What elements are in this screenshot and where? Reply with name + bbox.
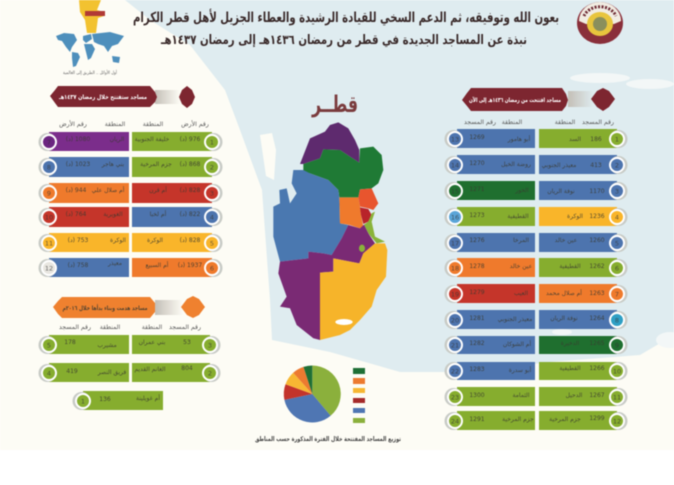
row 11: 1267 bbox=[589, 392, 605, 399]
map detail: small enclave bbox=[359, 245, 365, 252]
row 8: 8 bbox=[615, 316, 619, 324]
banner bbox=[53, 296, 205, 318]
row 12: جزم المرخية bbox=[549, 416, 581, 423]
panel: mosques inaugurated during 2016 bbox=[38, 296, 220, 410]
row 6: (د) 1937 bbox=[178, 262, 202, 269]
pie legend bbox=[353, 368, 365, 423]
row 15 bbox=[444, 181, 535, 200]
row 4: أم لخبا bbox=[150, 210, 167, 218]
row 21: 21 bbox=[451, 342, 459, 350]
row 4: 4 bbox=[615, 214, 619, 222]
banner: مساجد هدمت وبناء بدأها خلال ٢٠١٦م bbox=[62, 304, 148, 312]
row 14: 1270 bbox=[469, 160, 485, 167]
row 6: أم السبيع bbox=[146, 261, 169, 269]
row 4 bbox=[539, 207, 628, 226]
row 23: 1300 bbox=[469, 392, 485, 399]
region: Doha bbox=[364, 212, 385, 243]
row 10 bbox=[539, 362, 628, 380]
row 1: بني عمران bbox=[139, 339, 166, 346]
row 3 bbox=[539, 181, 628, 200]
region: Al Wakrah bbox=[320, 243, 387, 340]
row 10: الغويرية bbox=[103, 211, 123, 218]
row 4: 1236 bbox=[589, 213, 605, 220]
map detail: Khor Al Adaid inlet bbox=[335, 319, 353, 325]
row 11: (د) 753 bbox=[68, 237, 89, 244]
column headers: المنطقة bbox=[100, 324, 121, 331]
row 6 bbox=[539, 258, 628, 277]
row 24: 24 bbox=[451, 418, 459, 426]
row 8: 1264 bbox=[589, 315, 605, 322]
row 18: عين خالد bbox=[510, 263, 532, 270]
row 7: 1263 bbox=[589, 290, 605, 297]
banner: مساجد افتتحت من رمضان ١٤٣٦هـ إلى الآن bbox=[469, 96, 561, 104]
row 21: أم الشوكان bbox=[503, 340, 531, 348]
row 14: 14 bbox=[451, 162, 459, 170]
row 3: 3 bbox=[615, 188, 619, 196]
row 1: 3 bbox=[208, 342, 212, 350]
row 19: 19 bbox=[451, 290, 459, 298]
row 16: 1273 bbox=[469, 212, 485, 219]
row 8: (د) 1023 bbox=[66, 161, 90, 168]
row 12: 12 bbox=[613, 418, 621, 426]
row 6: 6 bbox=[210, 264, 214, 272]
row 21 bbox=[444, 336, 535, 354]
row 14 bbox=[444, 155, 535, 174]
row 2 bbox=[132, 157, 222, 177]
region: Al Shamal bbox=[300, 122, 359, 164]
row 10: 1266 bbox=[589, 365, 605, 372]
row 9: أم صلال علي bbox=[92, 186, 125, 194]
row 4: 4 bbox=[47, 370, 51, 378]
column headers: رقم المسجد bbox=[59, 324, 91, 331]
row 8: بني هاجر bbox=[101, 161, 125, 168]
row 11: 11 bbox=[613, 394, 621, 402]
column headers: رقم المسجد bbox=[169, 324, 201, 331]
row 5 bbox=[539, 233, 628, 252]
row 11: 11 bbox=[45, 240, 53, 248]
row 18: 1278 bbox=[469, 263, 485, 270]
row 6: 1262 bbox=[589, 263, 605, 270]
row 4: الوكرة bbox=[567, 213, 583, 220]
title bbox=[133, 9, 559, 48]
row 16 bbox=[444, 207, 535, 226]
column headers: رقم الأرض bbox=[181, 120, 209, 128]
row 22: أبو سدرة bbox=[509, 366, 532, 374]
row 17: 17 bbox=[451, 240, 459, 248]
column headers bbox=[59, 120, 209, 128]
row 13: 13 bbox=[451, 136, 459, 144]
row 18: 18 bbox=[451, 264, 459, 272]
row 15: الخور bbox=[514, 187, 529, 194]
row 20 bbox=[444, 310, 535, 329]
row 5: الوكرة bbox=[147, 237, 163, 244]
row 7: 7 bbox=[615, 290, 619, 298]
row 5 bbox=[72, 391, 163, 410]
row 12 bbox=[38, 258, 129, 277]
row 5: 136 bbox=[99, 396, 111, 403]
row 16: القطيفية bbox=[507, 213, 529, 220]
row 1 bbox=[132, 335, 220, 354]
column headers: المنطقة bbox=[105, 121, 126, 128]
row 5: عين خالد bbox=[555, 237, 577, 244]
row 22: 22 bbox=[451, 368, 459, 376]
row 7 bbox=[539, 284, 628, 303]
row 1: السد bbox=[569, 136, 581, 143]
logo: world map bbox=[56, 0, 124, 76]
row 11 bbox=[38, 233, 129, 252]
row 6: القطيفية bbox=[559, 263, 581, 270]
row 7: 7 bbox=[47, 138, 51, 146]
row 4 bbox=[38, 363, 129, 382]
row 4: فريق النصر bbox=[97, 369, 126, 376]
column headers: رقم الأرض bbox=[59, 120, 87, 128]
row 10 bbox=[38, 207, 129, 227]
row 20: 20 bbox=[451, 316, 459, 324]
row 11 bbox=[539, 387, 628, 406]
row 3: نوفة الريان bbox=[547, 188, 575, 195]
row 9: 9 bbox=[615, 342, 619, 350]
row 3: 3 bbox=[210, 190, 214, 198]
panel: mosques opened since Ramadan 1436 bbox=[444, 88, 628, 430]
row 13 bbox=[444, 129, 535, 148]
row 12: 12 bbox=[45, 264, 53, 272]
row 3: 1170 bbox=[589, 188, 605, 195]
row 6: 6 bbox=[615, 264, 619, 272]
row 1 bbox=[132, 132, 222, 151]
region: Al Khor bbox=[303, 147, 383, 197]
column headers: رقم المسجد bbox=[464, 119, 496, 126]
row 19: العيب bbox=[514, 290, 528, 297]
row 2: جزم المرخية bbox=[140, 161, 172, 168]
region: Al Rayyan bbox=[278, 225, 375, 340]
row 3: 178 bbox=[64, 339, 76, 346]
row 8: 8 bbox=[47, 164, 51, 172]
row 23 bbox=[444, 387, 535, 406]
title: نبذة عن المساجد الجديدة في قطر من رمضان ١٤٣٦هـ إلى رمضان ١٤٣٧هـ bbox=[160, 33, 527, 48]
pie chart bbox=[284, 366, 341, 422]
column headers bbox=[464, 119, 614, 126]
row 5: 5 bbox=[210, 240, 214, 248]
row 5: 1 bbox=[81, 398, 85, 406]
row 1 bbox=[539, 129, 628, 148]
row 15: 1271 bbox=[469, 186, 485, 193]
column headers: المنطقة bbox=[143, 121, 164, 128]
row 7: (د) 1080 bbox=[66, 136, 90, 143]
region: Al Daayen bbox=[358, 188, 378, 210]
row 2: 2 bbox=[208, 370, 212, 378]
row 2 bbox=[539, 155, 628, 174]
row 17: المرخا bbox=[513, 237, 529, 244]
row 3: 5 bbox=[47, 342, 51, 350]
row 3: مشيرب bbox=[97, 342, 117, 349]
row 7: الريان bbox=[110, 136, 125, 143]
row 2: 2 bbox=[615, 162, 619, 170]
banner bbox=[462, 88, 615, 111]
row 23: 23 bbox=[451, 394, 459, 402]
row 4: (د) 822 bbox=[180, 211, 201, 218]
row 10: القطيفية bbox=[559, 365, 581, 372]
row 1: 1 bbox=[615, 136, 619, 144]
row 20: معيذر الجنوبي bbox=[498, 316, 532, 323]
row 14: روضة الخيل bbox=[501, 161, 531, 168]
row 15: 15 bbox=[451, 188, 459, 196]
row 22 bbox=[444, 362, 535, 380]
column headers: المنطقة bbox=[502, 119, 523, 126]
banner bbox=[50, 86, 195, 108]
row 12: 1299 bbox=[589, 415, 605, 422]
row 9: (د) 944 bbox=[66, 187, 87, 194]
row 13: 1269 bbox=[469, 134, 485, 141]
row 19 bbox=[444, 284, 535, 303]
row 5: 1260 bbox=[589, 237, 605, 244]
panel: mosques to open by Ramadan 1437 bbox=[38, 86, 222, 277]
row 2: 804 bbox=[181, 365, 193, 372]
row 3 bbox=[38, 335, 129, 354]
row 7: أم صلال محمد bbox=[546, 289, 582, 297]
row 19: 1279 bbox=[469, 289, 485, 296]
row 18 bbox=[444, 258, 535, 277]
pie caption: توزيع المساجد المفتتحة خلال الفترة المذكورة حسب المناطق bbox=[255, 435, 401, 443]
row 3: أم قرن bbox=[149, 186, 167, 194]
row 1: 186 bbox=[590, 136, 602, 143]
row 8 bbox=[539, 310, 628, 329]
row 9 bbox=[539, 336, 628, 354]
row 24 bbox=[444, 411, 535, 430]
row 6 bbox=[132, 258, 222, 277]
region: Al Shahaniya bbox=[273, 170, 348, 262]
row 1: 53 bbox=[183, 339, 191, 346]
map of Qatar bbox=[273, 122, 387, 340]
row 2: الغانم القديم bbox=[134, 366, 166, 373]
row 2: 2 bbox=[210, 164, 214, 172]
row 2 bbox=[132, 363, 220, 382]
row 4 bbox=[132, 207, 222, 227]
row 7 bbox=[38, 132, 129, 151]
region: Umm Salal bbox=[339, 197, 363, 228]
row 12 bbox=[539, 411, 628, 430]
row 5: 5 bbox=[615, 240, 619, 248]
row 9: الدخيرة bbox=[561, 340, 580, 347]
row 24: جزم المرخية bbox=[502, 416, 534, 423]
row 4: 419 bbox=[66, 368, 78, 375]
row 9: 1265 bbox=[589, 340, 605, 347]
row 11: الوكرة bbox=[110, 237, 126, 244]
row 9: 9 bbox=[47, 190, 51, 198]
row 2: معيذر الجنوبي bbox=[542, 162, 576, 169]
row 8 bbox=[38, 157, 129, 177]
row 20: 1281 bbox=[469, 315, 485, 322]
row 2: (د) 868 bbox=[180, 161, 201, 168]
logo: world map: أول الأوائل .. الطريق إلى العالمية bbox=[63, 69, 117, 76]
row 10: (د) 764 bbox=[66, 211, 87, 218]
row 5: (د) 828 bbox=[180, 237, 201, 244]
row 16: 16 bbox=[451, 214, 459, 222]
column headers: المنطقة bbox=[555, 119, 576, 126]
row 2: 413 bbox=[590, 162, 602, 169]
row 12: (د) 758 bbox=[68, 262, 89, 269]
row 10: 10 bbox=[45, 214, 53, 222]
row 21: 1282 bbox=[469, 340, 485, 347]
row 1: خليفة الجنوبية bbox=[135, 136, 170, 143]
row 24: 1291 bbox=[469, 416, 485, 423]
column headers: المنطقة bbox=[142, 324, 163, 331]
row 13: أبو هامور bbox=[507, 135, 531, 143]
column headers bbox=[59, 324, 201, 331]
emblem bbox=[577, 2, 623, 44]
row 17 bbox=[444, 233, 535, 252]
row 1: (د) 976 bbox=[180, 136, 201, 143]
row 8: نوفة الريان bbox=[550, 315, 578, 322]
banner: مساجد ستفتتح خلال رمضان ١٤٣٧هـ bbox=[58, 94, 147, 101]
row 10: 10 bbox=[613, 368, 621, 376]
row 1: 1 bbox=[210, 138, 214, 146]
row 22: 1283 bbox=[469, 366, 485, 373]
row 4: 4 bbox=[210, 214, 214, 222]
row 23: الثمامة bbox=[512, 392, 530, 399]
row 5: أم غويلينة bbox=[136, 394, 160, 402]
row 9 bbox=[38, 183, 129, 203]
column headers: رقم المسجد bbox=[582, 119, 614, 126]
row 17: 1276 bbox=[469, 237, 485, 244]
row 5 bbox=[132, 233, 222, 252]
row 3: (د) 828 bbox=[180, 187, 201, 194]
row 3 bbox=[132, 183, 222, 203]
region: Doha north bbox=[360, 207, 372, 224]
heading: Qatar: قطــر bbox=[311, 92, 358, 118]
row 12: معيذر bbox=[107, 260, 122, 267]
row 11: الدحيل bbox=[566, 392, 583, 399]
